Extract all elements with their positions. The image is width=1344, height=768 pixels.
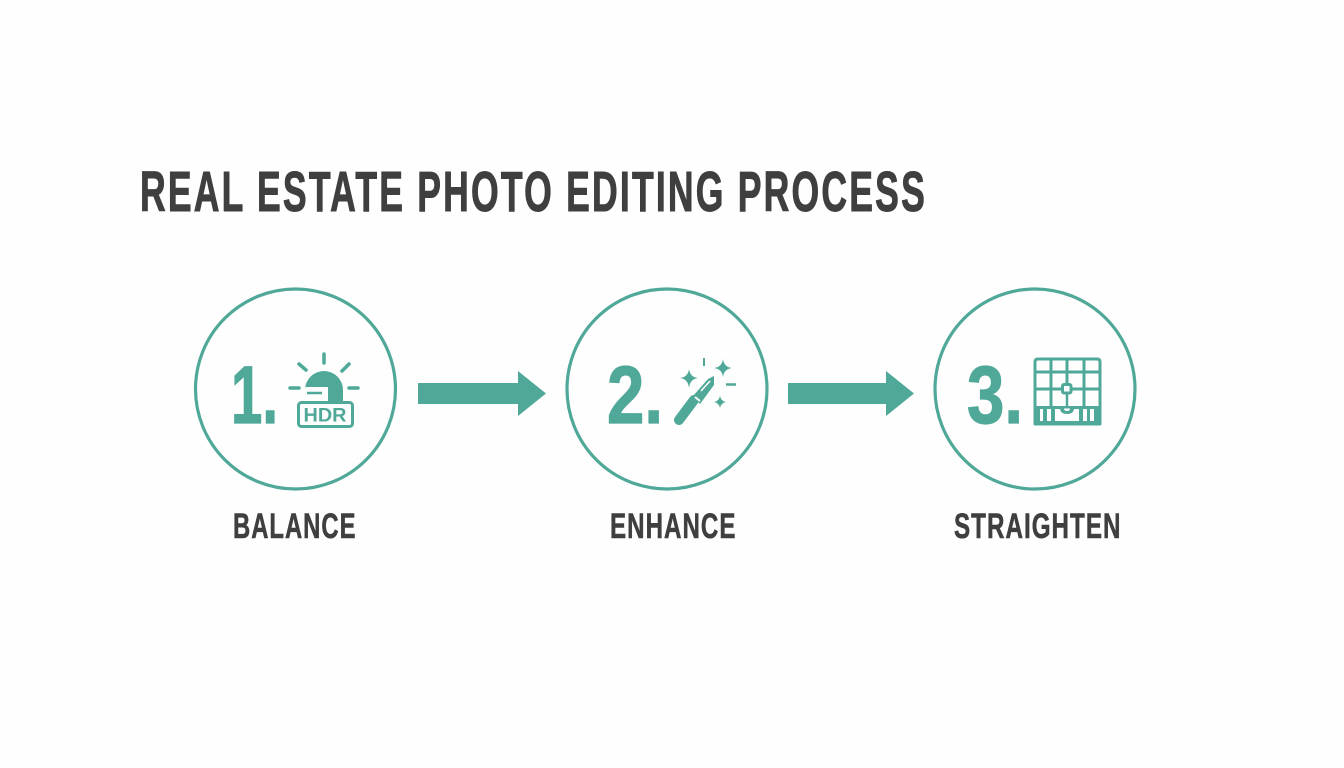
step 2 circle: [567, 289, 767, 489]
step 3 label: STRAIGHTEN: [954, 507, 1122, 546]
step 1 label: BALANCE: [233, 507, 356, 546]
panel: step 3 straighten: [935, 289, 1135, 546]
icon: HDR sun: HDR: [304, 406, 347, 426]
panel: step 2 enhance: [567, 289, 767, 546]
step 2 label: ENHANCE: [610, 507, 736, 546]
arrow: step 1 to step 2: [418, 371, 546, 416]
step 1 circle: [196, 289, 396, 489]
step 2 number: 2.: [607, 350, 663, 441]
step 1 number: 1.: [231, 350, 278, 441]
step 3 circle: [935, 289, 1135, 489]
step 3 number: 3.: [967, 350, 1023, 441]
icon: grid with spirit level: [1034, 359, 1101, 425]
icon: HDR sun: [290, 354, 358, 426]
arrow: step 2 to step 3: [788, 371, 914, 416]
panel: step 1 balance: [196, 289, 396, 546]
icon: magic wand with sparkles: [679, 358, 736, 420]
